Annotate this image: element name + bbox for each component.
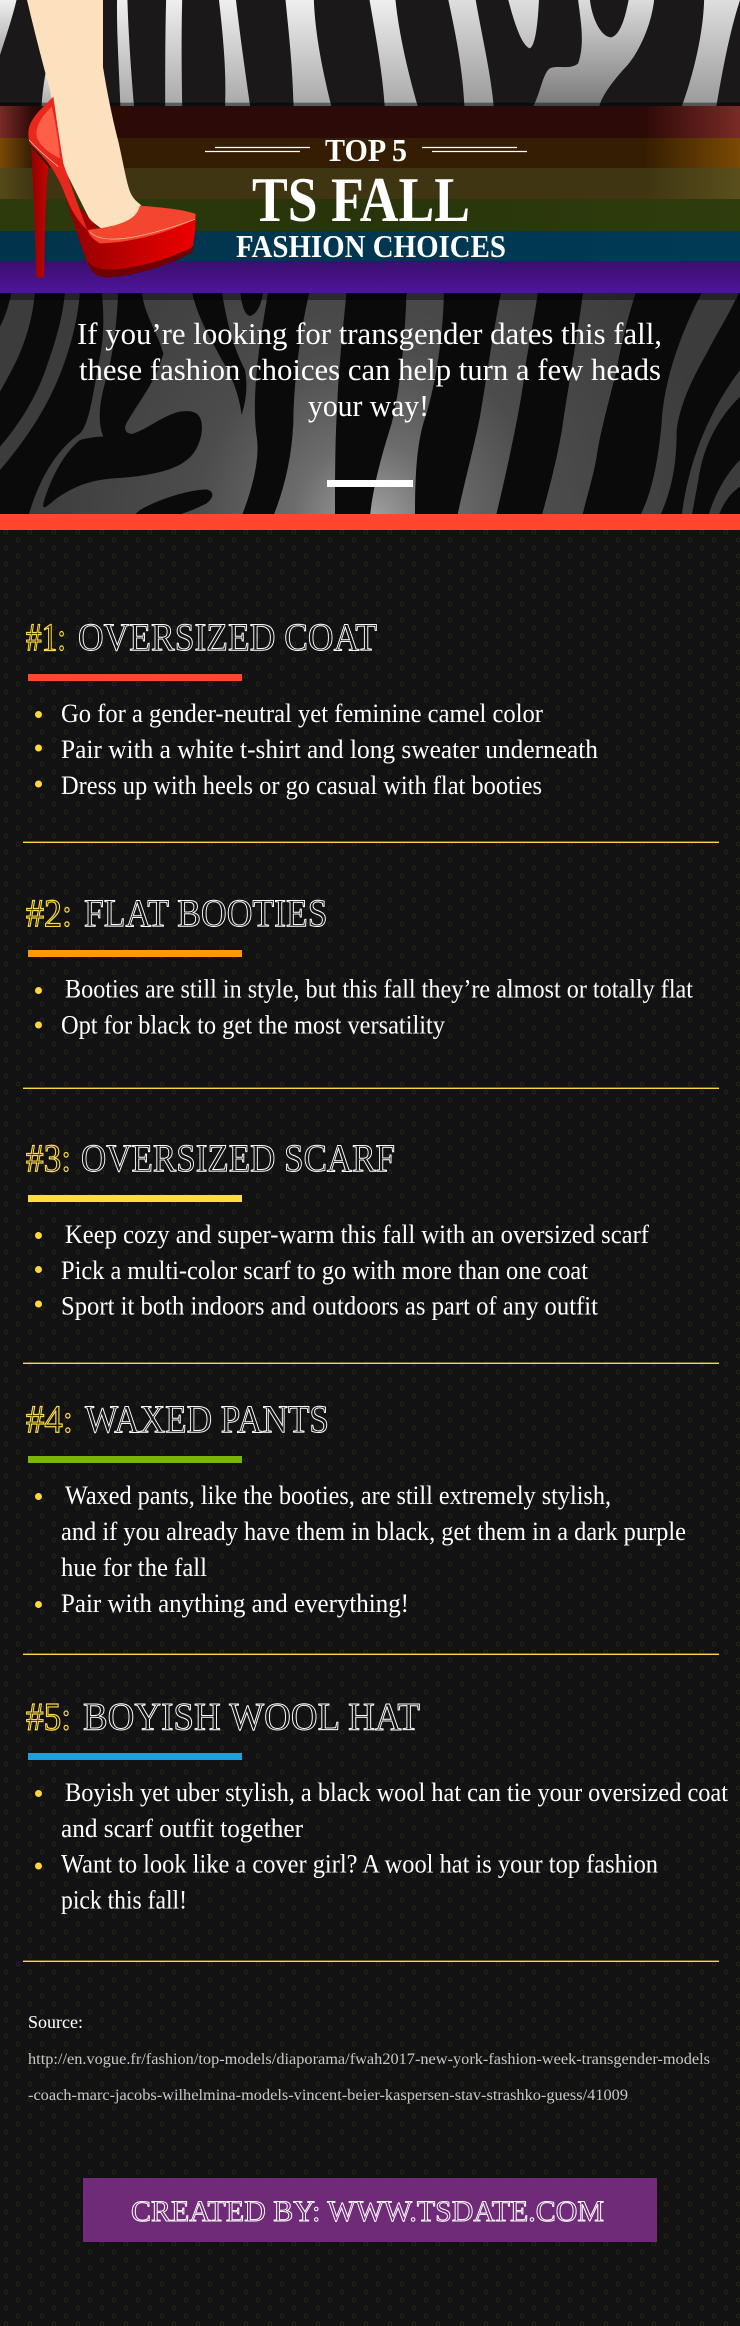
bullet list 1 xyxy=(35,699,598,800)
bullet list 5: Want to look like a cover girl? A wool hat is your top fashion xyxy=(61,1850,658,1878)
section 4: waxed pants xyxy=(26,1398,686,1618)
bullet list 4: Pair with anything and everything! xyxy=(61,1589,409,1618)
bullet list 2: Opt for black to get the most versatility xyxy=(61,1010,445,1040)
bullet list 4: and if you already have them in black, get them in a dark purple xyxy=(61,1517,686,1546)
underline 3 xyxy=(28,1195,242,1202)
bullet list 3: Sport it both indoors and outdoors as part of any outfit xyxy=(61,1292,599,1320)
heading 3: OVERSIZED SCARF xyxy=(81,1137,395,1180)
leg xyxy=(27,0,141,230)
illustration: leg and red stiletto xyxy=(27,0,196,278)
top zebra pattern xyxy=(0,0,740,106)
rainbow bands xyxy=(0,106,740,293)
underline 5 xyxy=(28,1753,242,1760)
heading 4: WAXED PANTS xyxy=(85,1398,329,1441)
heading 3: #3: xyxy=(26,1137,71,1180)
heading 2: FLAT BOOTIES xyxy=(84,892,328,935)
shoe platform xyxy=(63,190,196,277)
bullet list 3: Keep cozy and super-warm this fall with an oversized scarf xyxy=(65,1220,649,1249)
bullet list 4: Waxed pants, like the booties, are still extremely stylish, xyxy=(65,1481,611,1510)
platform dark rim xyxy=(87,247,193,278)
bullet list 5 xyxy=(35,1778,729,1914)
heading 1: #1: xyxy=(26,616,66,659)
intro text xyxy=(77,316,662,423)
white dash xyxy=(327,480,413,487)
section 5: boyish wool hat xyxy=(26,1696,729,1914)
intro text: these fashion choices can help turn a few heads xyxy=(79,352,661,387)
bullet list 5: pick this fall! xyxy=(61,1886,187,1914)
bullet list 3 xyxy=(35,1220,649,1320)
title: ts fall: TS FALL xyxy=(252,164,470,235)
section 2: flat booties xyxy=(26,892,694,1040)
bullet list 5: and scarf outfit together xyxy=(61,1814,303,1843)
source url: http://en.vogue.fr/fashion/top-models/diaporama/fwah2017-new-york-fashion-week-transgender-models xyxy=(28,2051,710,2068)
bullet list 1: Go for a gender-neutral yet feminine camel color xyxy=(61,699,543,728)
underline 4 xyxy=(28,1456,242,1463)
shoe counter xyxy=(28,97,87,230)
bullet list 4 xyxy=(35,1481,686,1618)
heading 4: #4: xyxy=(26,1398,73,1441)
section 3: oversized scarf xyxy=(26,1137,649,1320)
title: fashion choices: FASHION CHOICES xyxy=(236,228,506,264)
source url xyxy=(28,2051,710,2104)
intro text: If you’re looking for transgender dates this fall, xyxy=(77,316,662,351)
bullet list 4: hue for the fall xyxy=(61,1553,207,1582)
footer banner xyxy=(83,2178,657,2242)
heading 1: OVERSIZED COAT xyxy=(78,616,377,659)
lower zebra pattern xyxy=(0,290,740,516)
red banner rule xyxy=(0,514,740,530)
stiletto heel xyxy=(31,147,48,277)
heading 5: #5: xyxy=(26,1696,71,1738)
underline 2 xyxy=(28,950,242,957)
footer text: CREATED BY: WWW.TSDATE.COM xyxy=(131,2195,604,2228)
heading 2: #2: xyxy=(26,892,72,935)
title block xyxy=(205,132,527,264)
intro text: your way! xyxy=(308,388,429,423)
bullet list 1: Dress up with heels or go casual with flat booties xyxy=(61,771,542,800)
title: top 5: TOP 5 xyxy=(325,132,407,168)
bullet list 3: Pick a multi-color scarf to go with more than one coat xyxy=(61,1256,589,1285)
source xyxy=(28,2012,710,2104)
heading 5: BOYISH WOOL HAT xyxy=(83,1696,420,1738)
title ornament lines xyxy=(205,148,527,152)
shoe highlight xyxy=(36,107,60,158)
shoe vamp xyxy=(87,206,196,243)
bullet list 2 xyxy=(35,974,694,1040)
bullet list 1: Pair with a white t-shirt and long sweater underneath xyxy=(61,735,598,764)
source label: Source: xyxy=(28,2012,83,2032)
bullet list 2: Booties are still in style, but this fall they’re almost or totally flat xyxy=(65,974,694,1004)
underline 1 xyxy=(28,674,242,681)
source url: -coach-marc-jacobs-wilhelmina-models-vincent-beier-kaspersen-stav-strashko-guess/41009 xyxy=(28,2087,628,2104)
section 1: oversized coat xyxy=(26,616,598,800)
